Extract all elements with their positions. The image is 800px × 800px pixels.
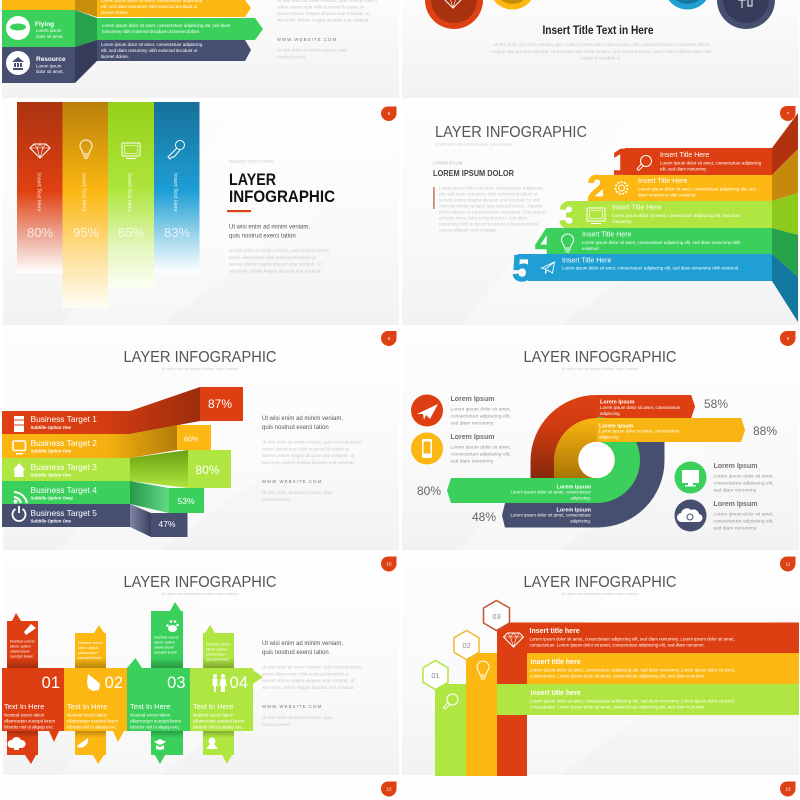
side text [262, 641, 362, 727]
description text: magna aliquam erat volutpat. Ut wisi enim ad minim veniam, quis nostrud exerci. exerci tation ullamcorper nibh [491, 49, 712, 54]
band panel 01: ullamcorper suscipit lorem [4, 718, 55, 724]
percentages: 80% [417, 484, 441, 498]
navy block and fold [2, 40, 251, 83]
target 4: Subtitle Option Onez [30, 496, 74, 500]
bottom tab red [7, 731, 59, 764]
band panel 01: Text In Here [4, 702, 44, 711]
hexagon 01 [423, 660, 448, 690]
ring navy with arrow: Lorem ipsum dolor sit amet, consectetuer [510, 512, 592, 518]
step 1: 1 [612, 142, 633, 182]
side text: WWW.WEBSITE.COM [262, 479, 322, 484]
title: LAYER INFOGRAPHIC [124, 349, 276, 366]
title: layer infographic bold: INFOGRAPHIC [229, 187, 335, 206]
bar blue 83%: 83% [164, 225, 190, 240]
top tab orange: ullamcorper [78, 651, 99, 655]
text right 2: sed diam nonummy. [714, 526, 757, 532]
step 4: Insert Title Here [582, 232, 632, 238]
icon: airship [6, 16, 30, 40]
bar orange 95%: Insert Text Here [80, 173, 86, 212]
icon: cloud [674, 500, 706, 532]
target 5: 47% [158, 519, 176, 529]
band panel 02: Text In Here [67, 702, 107, 711]
arrow green: Lorem Ipsum [556, 484, 591, 490]
side text: tation ullamcorper nibh euismod tincidunt ut [262, 446, 350, 452]
band orange: Lorem ipsum dolor sit amet, consectetuer adipiscing elit, sed diam nonummy. Lorem ipsum dolor sit amet, [530, 668, 735, 672]
top tab red: suscipit lorem [10, 654, 33, 658]
side text: nostrud exerci [262, 722, 290, 727]
text right 2: Lorem Ipsum [714, 501, 757, 508]
target 3: Business Target 3 [30, 462, 97, 472]
slide 6: vertical gradient bars [17, 102, 335, 308]
bar lime 85%: Insert Text Here [126, 173, 132, 212]
step 4: Lorem ipsum dolor sit amet, consectetuer adipiscing elit, sed diam nonummy nibh [582, 240, 741, 245]
side text: nostrud exerci [277, 54, 305, 60]
body text: tation ullamcorper nibh euismod tincidunt ut [229, 255, 317, 260]
text right 1 [714, 463, 774, 494]
circle red [425, 0, 483, 29]
arrow text: Lorem ipsum dolor sit amet, consectetuer adipiscing [101, 42, 203, 47]
band panel 01: Nostrud exerci tation [4, 712, 45, 718]
target 1: Subtitle Option One [30, 425, 71, 430]
band red: Lorem ipsum dolor sit amet, consectetuer adipiscing elit, sed diam nonummy. Lorem ipsum dolor sit amet, [530, 636, 735, 642]
page badges [381, 106, 796, 796]
top tab red: ullamcorper [10, 650, 31, 654]
description text: Ut wisi enim ad minim veniam, quis nostrud exerci tation ullamcorper nibh euismod tincidunt ut laoreet dolore [493, 42, 710, 47]
title: LAYER INFOGRAPHIC [124, 574, 276, 591]
arrow text: laoreet dolore. [101, 54, 129, 59]
percentages [417, 397, 777, 524]
circle orange [489, 0, 536, 10]
band panel 01: lobortis nisl ut aliquip exc. [4, 724, 54, 730]
band panel 02 [64, 668, 127, 731]
ring green [597, 417, 640, 503]
side text: Ut wisi enim ad minim veniam, quis [277, 48, 348, 52]
title: layer infographic bold: LAYER [229, 170, 276, 189]
title: insert title text: Insert Title Text in Here [542, 25, 654, 37]
kicker: LOREM IPSUM [433, 160, 463, 166]
side text [277, 0, 377, 60]
step 3: Insert Title Here [612, 204, 662, 212]
hole [578, 442, 615, 478]
band panel 01 [2, 668, 64, 731]
percentages: 48% [472, 510, 496, 524]
subtitle: Ut wisi enim ad minim veniam, quis nostrud [562, 366, 638, 371]
paragraph: enim ad minim veniam, quis nostrud exerci . lobortis [439, 204, 543, 208]
percentages: 58% [704, 397, 728, 411]
title: LAYER INFOGRAPHIC [435, 124, 587, 141]
text right 2 [714, 501, 774, 532]
red divider [227, 210, 251, 212]
target 1: Business Target 1 [30, 414, 97, 424]
arrow text: Lorem ipsum dolor sit amet, consectetuer adipiscing elit, sed diam [102, 23, 231, 28]
label: flying: dolor sit amet, [36, 34, 64, 39]
side text [262, 416, 362, 502]
side text: WWW.WEBSITE.COM [262, 704, 322, 709]
text left 2 [450, 434, 511, 464]
target 5: Subtitle Option One [30, 518, 71, 524]
bar red 80%: Insert Text Here [36, 173, 42, 212]
column orange [466, 653, 497, 776]
target 3: 80% [195, 463, 220, 477]
arrow labels [599, 400, 681, 440]
top tab orange: Nostrud exerci [78, 641, 103, 645]
step 4: euismod . [582, 246, 601, 251]
subheading [229, 224, 310, 240]
band lime: consectetuer. Lorem ipsum dolor sit amet, consectetuer adipiscing elit, sed diam nonumm. [530, 704, 705, 710]
band lime: Lorem ipsum dolor sit amet, consectetuer adipiscing elit, sed diam nonummy. Lorem ipsum dolor sit amet, [530, 698, 735, 704]
arrow green: adipiscing. [570, 496, 591, 500]
step 2 [587, 168, 772, 209]
page badges: 6 [388, 111, 391, 116]
arrow text: nonummy nibh euismod tincidunt ut laoreet dolore. [102, 29, 200, 34]
label: flying: Flying [35, 21, 54, 28]
text left 2: consectetuer adipiscing elit, [450, 452, 511, 458]
slide 7: numbered steps [433, 113, 798, 322]
top tab lime: Nostrud exerci [206, 642, 231, 646]
top tab green: tation option [154, 640, 175, 644]
label: resource: Resource [36, 56, 66, 63]
target 3: Subtitle Option One [30, 472, 71, 478]
side text: Ut wisi enim ad minim veniam, [262, 416, 343, 422]
text right 1: sed diam nonummy. [714, 488, 757, 494]
side text: wisi enim. dolore magna aliquam erat volutpat. [262, 460, 355, 465]
subheading: Ut wisi enim ad minim veniam, [229, 224, 310, 230]
target 1 [2, 387, 243, 434]
band panel 03: 03 [167, 674, 186, 692]
arrow text: elit, sed diam nonummy nibh euismod tincidunt ut [101, 4, 198, 9]
hexagon 02: 02 [462, 641, 471, 650]
step 3: nonummy . [612, 219, 634, 224]
step 5 [512, 248, 772, 289]
page badges: 12 [386, 786, 392, 792]
column lime [435, 684, 466, 776]
bar lime 85%: 85% [118, 225, 144, 240]
bar orange 95%: 95% [73, 225, 99, 240]
band panel 04: lobortis nisl ut aliquip exc. [193, 724, 243, 730]
hexagon 03 [484, 600, 510, 630]
label: flying [35, 21, 64, 39]
band panel 04: 04 [230, 674, 248, 692]
side text: laoreet dolore magna aliquam erat volutpat. Ut [262, 678, 355, 683]
icon: diamond [504, 633, 524, 647]
subheading: quis nostrud exerci tation [229, 234, 296, 240]
subtitle: Ut wisi enim ad minim veniam, quis nostrud [162, 366, 238, 371]
text right 1: Lorem ipsum dolor sit amet, [714, 474, 774, 480]
target 2: 60% [184, 436, 198, 444]
step 2: 2 [587, 168, 608, 209]
side text: nostrud exerci [262, 497, 290, 502]
step 3: Lorem ipsum dolor sit amet, consectetuer adipiscing elit, sed diam [612, 213, 741, 218]
text right 1: Lorem Ipsum [714, 463, 757, 470]
hexagon 02 [454, 630, 479, 660]
step 4: 4 [535, 221, 556, 262]
side text: WWW.WEBSITE.COM [277, 37, 337, 42]
bottom tab orange [75, 731, 124, 764]
page badges: 13 [785, 786, 791, 792]
page badges: 11 [786, 562, 791, 566]
step 4 [535, 221, 772, 262]
band orange: Insert title here [530, 659, 581, 666]
side text: wisi enim. dolore magna aliquam erat volutpat. [277, 18, 370, 22]
ring orange with arrow [554, 418, 745, 478]
page badges: 8 [388, 336, 391, 341]
percentages: 88% [753, 424, 777, 438]
icon: bulb [477, 661, 489, 679]
text left 2: Lorem ipsum dolor sit amet, [450, 444, 511, 450]
target 5 [2, 504, 188, 537]
top tab red [7, 613, 38, 668]
text right 1: consectetuer adipiscing elit, [714, 480, 774, 486]
page badges: 7 [787, 111, 790, 116]
title: layer infographic bold [229, 170, 335, 206]
text left 1 [450, 396, 511, 426]
band orange [527, 653, 799, 684]
top tab lime: suscipit lorem [206, 658, 229, 662]
step 2: Lorem ipsum dolor sit amet, consectetuer adipiscing elit, sed [638, 186, 756, 192]
side text: tation ullamcorper nibh euismod tincidunt ut [262, 672, 350, 676]
side text: Ut wisi enim ad minim veniam, quis nostrud exerci [262, 664, 362, 670]
icon: bank [6, 51, 30, 75]
target 4: 53% [177, 496, 195, 506]
body text: Ut wisi enim ad minim veniam, quis nostrud exerci [229, 248, 329, 253]
band lime: Insert title here [530, 690, 581, 697]
label: flying: Lorem ipsum [36, 28, 62, 33]
top tab orange: tation option [78, 646, 99, 650]
side text: Ut wisi enim ad minim veniam, quis nostrud exerci [262, 440, 362, 444]
side text: laoreet dolore magna aliquam erat volutpat. Ut [262, 453, 355, 458]
target 3 [2, 450, 231, 488]
text left 1: Lorem ipsum dolor sit amet, [450, 406, 511, 412]
kicker: INSERT TEXT HERE [229, 159, 274, 165]
step 5: 5 [512, 248, 533, 289]
top tab green: Nostrud exerci [154, 636, 179, 640]
arrow labels: adipiscing. [599, 434, 620, 440]
target 1: 87% [208, 397, 232, 411]
heading: LOREM IPSUM DOLOR [433, 169, 514, 178]
title: LAYER INFOGRAPHIC [524, 349, 676, 366]
step 2: diam nonummy nibh euismod . [638, 192, 698, 198]
text left 1: sed diam nonummy. [450, 420, 494, 426]
ring navy with arrow [502, 442, 665, 528]
green block and fold [2, 10, 263, 47]
step 1: elit, sed diam nonummy . [660, 166, 709, 172]
band red: consectetuer. Lorem ipsum dolor sit amet, consectetuer adipiscing elit, sed diam nonumm. [530, 642, 705, 648]
bar blue 83%: Insert Text Here [172, 173, 178, 212]
arrow text: elit, sed diam nonummy nibh euismod tincidunt ut [101, 48, 198, 53]
target 4: Business Target 4 [30, 485, 97, 495]
bar blue 83% [154, 102, 200, 273]
text left 1: Lorem Ipsum [450, 396, 494, 403]
label: resource [36, 56, 66, 74]
arrow text [101, 0, 231, 59]
slide: circles, top right [425, 0, 775, 60]
paragraph: elit, sed diam nonummy nibh euismod tincidunt ut [439, 192, 538, 196]
top tab green: ullamcorper [154, 646, 175, 650]
paragraph: laoreet dolore magna aliquam erat volutpat. Ut wisi [439, 198, 540, 202]
band panel 03: Text In Here [130, 702, 170, 711]
target 4 [2, 481, 204, 513]
band panel 03: ullamcorper suscipit lorem [130, 718, 181, 724]
title: LAYER INFOGRAPHIC [524, 574, 676, 591]
side text: Ut wisi enim ad minim veniam, quis [262, 715, 333, 720]
arrow green [447, 478, 597, 503]
arrow labels: Lorem Ipsum [599, 424, 634, 430]
band panel 02: Nostrud exerci tation [67, 712, 108, 718]
target 2 [2, 425, 211, 458]
description text: euismod tincidunt ut . [580, 56, 623, 60]
band panel 03: Nostrud exerci tation [130, 712, 171, 718]
paragraph: Lorem ipsum dolor sit amet, consectetuer adipiscing [439, 186, 543, 190]
top tab lime: ullamcorper [206, 652, 227, 656]
side text: quis nostrud exerci tation [262, 650, 329, 656]
arrow labels: Lorem ipsum dolor sit amet, consectetuer [599, 428, 680, 434]
band panel 04: ullamcorper suscipit lorem [193, 718, 244, 724]
bar red 80% [17, 102, 62, 273]
fan [772, 113, 798, 322]
band panel 03 [127, 658, 190, 731]
band panel 04 [190, 668, 263, 731]
step 1: Insert Title Here [660, 152, 710, 159]
bar lime 85% [108, 102, 154, 288]
band panel 02: lobortis nisl ut aliquip exc. [67, 724, 117, 730]
band panel 02: ullamcorper suscipit lorem [67, 718, 118, 724]
page badges: 10 [386, 562, 392, 566]
arrow text: laoreet dolore. [101, 10, 129, 15]
band panel 04: Nostrud exerci tation [193, 712, 234, 718]
arrow labels: adipiscing. [600, 411, 621, 416]
text left 1: consectetuer adipiscing elit, [450, 414, 511, 420]
step 5: Lorem ipsum dolor sit amet, consectetuer adipiscing elit, sed diam nonummy nibh euismod . [562, 266, 741, 270]
step 5: Insert Title Here [562, 258, 612, 264]
arrow green: Lorem ipsum dolor sit amet, consectetuer [510, 490, 592, 494]
icon: monitor [674, 462, 706, 494]
side text: Ut wisi enim ad minim veniam, quis [262, 490, 333, 495]
target 5: Business Target 5 [30, 508, 97, 518]
arrow labels: Lorem Ipsum [600, 400, 635, 406]
text left 2: sed diam nonummy. [450, 458, 494, 464]
page badges: 9 [787, 336, 790, 341]
top tab red: Nostrud exerci [10, 640, 35, 644]
bottom tab lime [203, 731, 234, 764]
band orange: consectetuer. Lorem ipsum dolor sit amet, consectetuer adipiscing elit, sed diam nonumm. [530, 674, 705, 678]
icon: phone [411, 432, 443, 464]
band panel 03: lobortis nisl ut aliquip exc. [130, 724, 180, 730]
body text: wisi enim. dolore magna aliquam erat volutpat. [229, 268, 322, 274]
band panel 04: Text In Here [193, 702, 233, 711]
icon: paper plane [411, 394, 443, 426]
subtitle: Ut wisi enim ad minim veniam, quis nostrud [162, 591, 238, 596]
side text: laoreet dolore magna aliquam erat volutpat. Ut [277, 11, 370, 16]
paragraph: magna aliquam erat volutpat. [439, 228, 497, 232]
description text [491, 42, 712, 60]
ring red with arrow [530, 395, 695, 478]
bottom tab green [151, 731, 183, 764]
column red [497, 622, 527, 776]
hexagon 03: 03 [492, 612, 501, 621]
step 3 [559, 195, 772, 236]
slide 5: stacked arrows, top left [2, 0, 377, 83]
paragraph: nisl ut aliquip ex ea commodo consequat. Duis autem [439, 210, 546, 214]
arrow labels: Lorem ipsum dolor sit amet, consectetuer [600, 405, 681, 410]
circle navy [717, 0, 775, 29]
band panel 01: 01 [42, 674, 60, 692]
side text: wisi enim. dolore magna aliquam erat volutpat. [262, 685, 355, 690]
slide 8: business targets [2, 349, 362, 537]
top tab orange [75, 625, 106, 668]
slide 9: interlocking ring [411, 349, 777, 532]
subtitle: Ut wisi enim ad minim veniam, quis nostrud [435, 142, 512, 146]
step 1 [612, 142, 772, 182]
target 2: Business Target 2 [30, 438, 97, 448]
text right 2: consectetuer adipiscing elit, [714, 518, 774, 524]
band lime [497, 684, 799, 715]
step 3: 3 [559, 195, 580, 236]
top tab lime: tation option [206, 648, 227, 652]
side bar [433, 187, 435, 209]
side text: tation ullamcorper nibh euismod tincidunt ut [277, 4, 365, 10]
band panel 02: 02 [105, 674, 123, 692]
top tab orange: suscipit lorem [78, 656, 101, 660]
top tab lime [203, 625, 234, 668]
circle blue [664, 0, 711, 10]
body text: laoreet dolore magna aliquam erat volutpat. Ut [229, 262, 322, 266]
paragraph: nonummy nibh euismod tincidunt ut laoreet dolore [439, 222, 539, 226]
bar orange 95% [62, 102, 108, 308]
text right 2: Lorem ipsum dolor sit amet, [714, 512, 774, 518]
bar red 80%: 80% [27, 225, 53, 240]
side text: Ut wisi enim ad minim veniam, [262, 641, 343, 647]
step 2: Insert Title Here [638, 178, 688, 185]
ring navy with arrow: adipiscing. [570, 518, 591, 524]
top tab green [151, 602, 183, 668]
target 2: Subtitle Option One [30, 448, 71, 454]
subtitle: Ut wisi enim ad minim veniam, quis nostrud [562, 591, 638, 596]
top tab green: suscipit lorem [154, 650, 177, 654]
slide 11: hexagon steps [423, 574, 799, 776]
text left 2: Lorem Ipsum [450, 434, 494, 441]
orange block and fold [2, 0, 251, 17]
paragraph: vel eum iriure dolor in hendrerit in. Sed diam [439, 216, 528, 220]
band red: Insert title here [530, 628, 580, 635]
step 1: Lorem ipsum dolor sit amet, consectetuer adipiscing [660, 160, 762, 166]
hexagon 01: 01 [431, 671, 440, 680]
slide 10: band with tabs [2, 574, 362, 764]
side text: quis nostrud exerci tation [262, 425, 329, 431]
body text [229, 248, 329, 274]
icon: magnifier [444, 694, 458, 709]
label: resource: Lorem ipsum [36, 64, 62, 68]
paragraph [439, 186, 546, 232]
band red [497, 622, 799, 654]
ring navy with arrow: Lorem Ipsum [556, 508, 591, 514]
top tab red: tation option [10, 644, 31, 648]
label: resource: dolor sit amet, [36, 69, 64, 74]
